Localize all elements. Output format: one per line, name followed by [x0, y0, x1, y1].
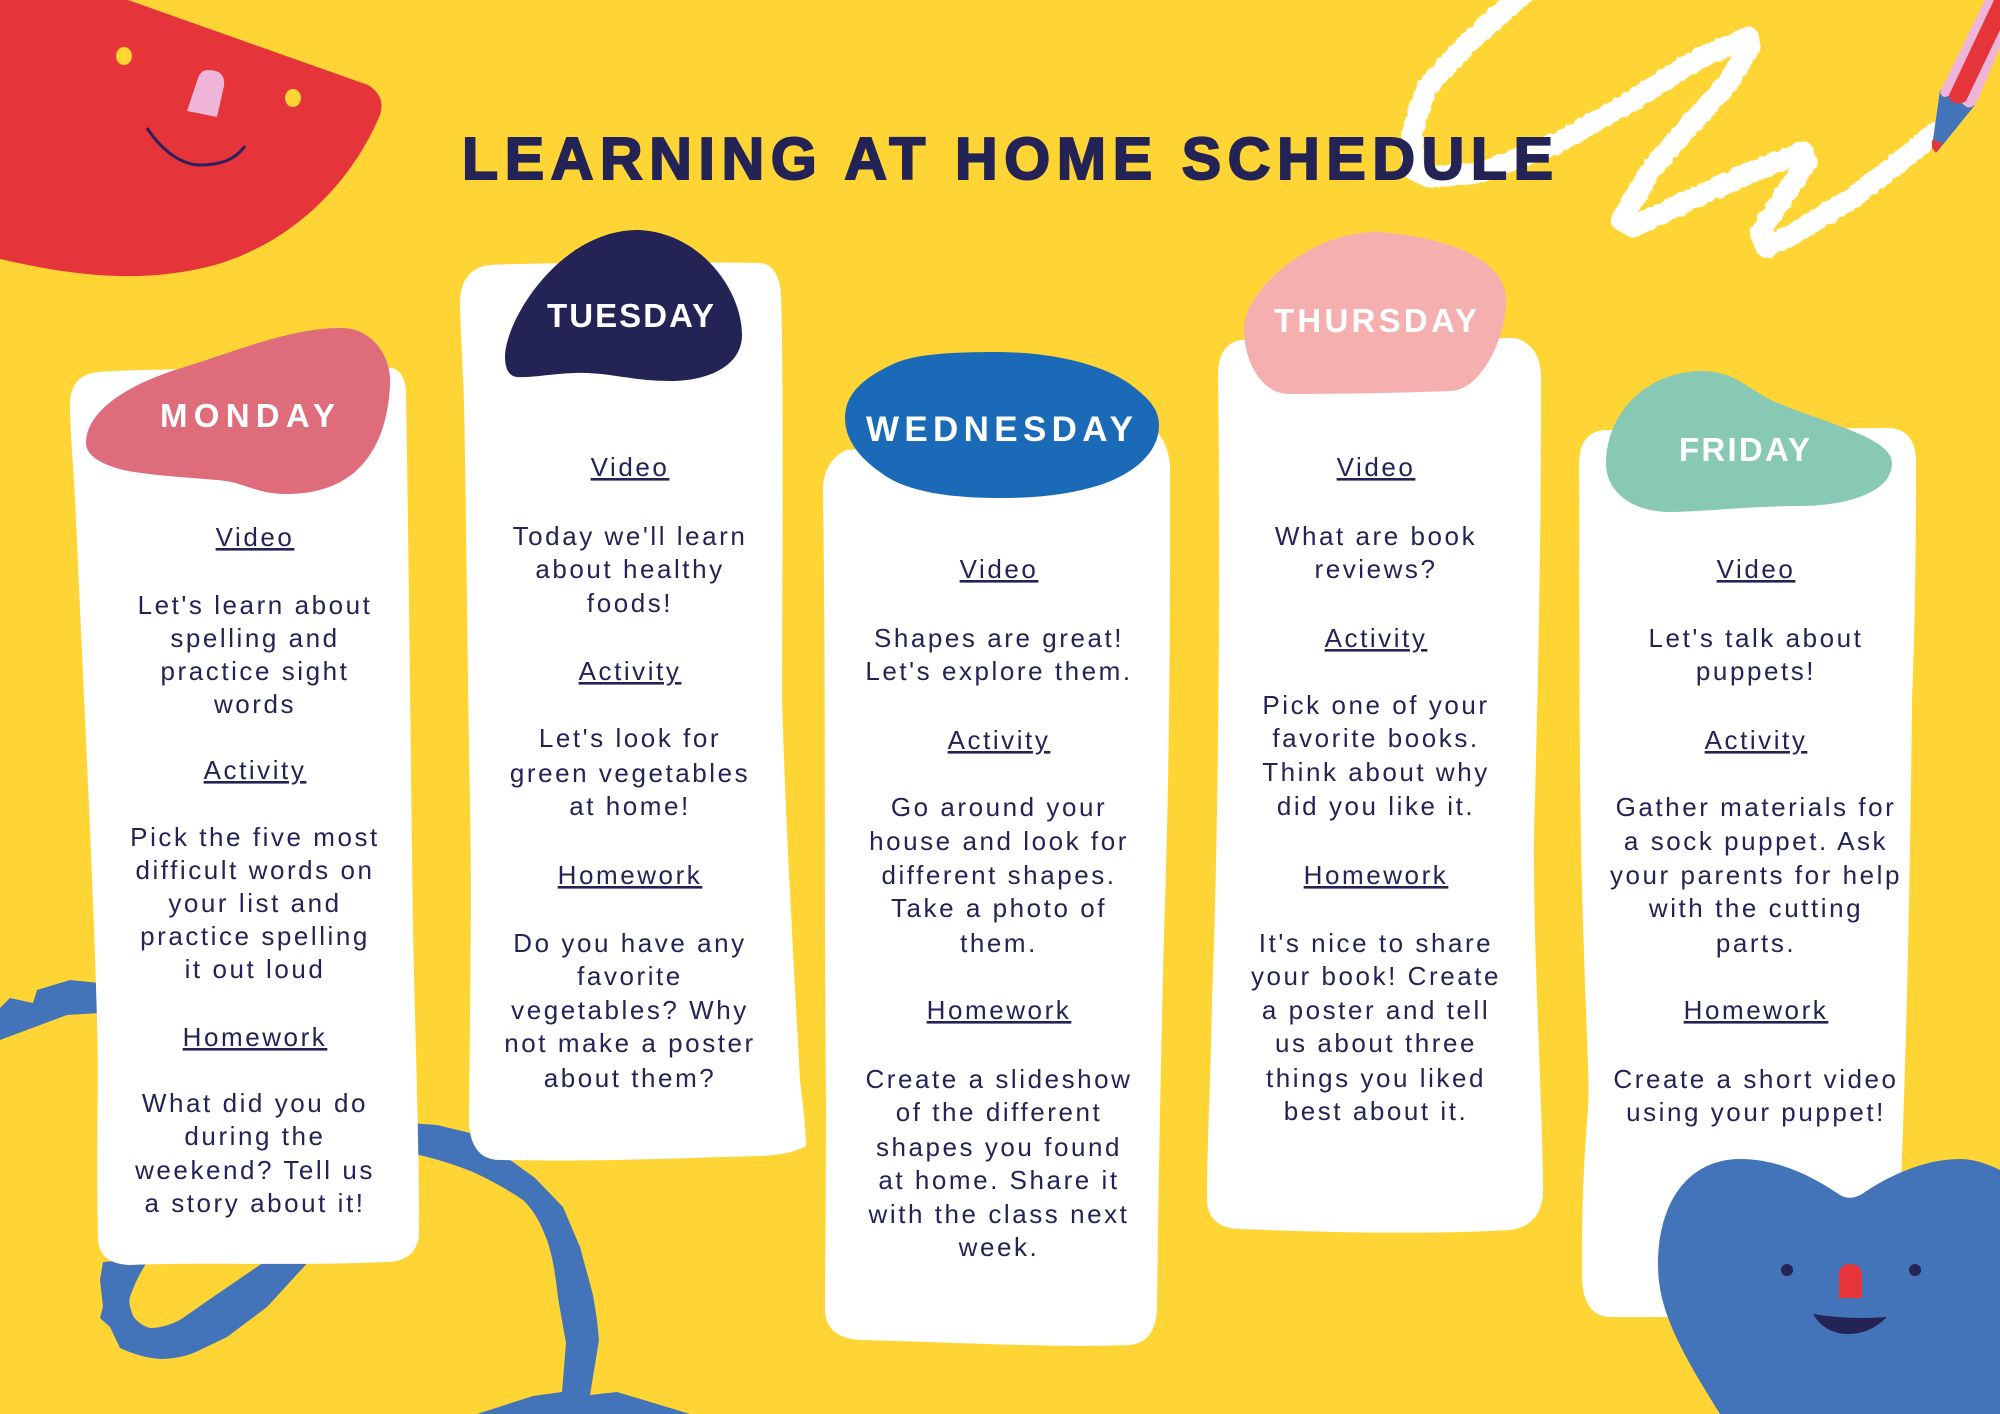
- tuesday text: not make a poster: [504, 1028, 756, 1058]
- tuesday text: Homework: [558, 860, 702, 890]
- thursday text: best about it.: [1284, 1096, 1468, 1126]
- wednesday text: [865, 554, 1133, 1262]
- friday text: Gather materials for: [1616, 792, 1896, 822]
- monday text: practice spelling: [140, 921, 370, 951]
- thursday text: It's nice to share: [1259, 928, 1493, 958]
- monday text: practice sight: [161, 656, 349, 686]
- monday text: difficult words on: [135, 855, 375, 885]
- wednesday text: shapes you found: [876, 1132, 1122, 1162]
- tuesday text: favorite: [577, 961, 683, 991]
- tuesday text: about them?: [544, 1063, 716, 1093]
- wednesday text: house and look for: [869, 826, 1129, 856]
- monday text: What did you do: [142, 1088, 368, 1118]
- friday heading: FRIDAY: [1679, 431, 1810, 468]
- monday text: Homework: [183, 1022, 327, 1052]
- friday text: parts.: [1716, 928, 1796, 958]
- monday text: weekend? Tell us: [134, 1155, 375, 1185]
- tuesday text: Let's look for: [539, 723, 721, 753]
- monday text: Let's learn about: [138, 590, 372, 620]
- tuesday text: Do you have any: [513, 928, 747, 958]
- blue squiggle background: [0, 980, 690, 1414]
- tuesday text: about healthy: [535, 554, 725, 584]
- thursday text: Homework: [1304, 860, 1448, 890]
- thursday text: What are book: [1275, 521, 1477, 551]
- monday text: Pick the five most: [130, 822, 380, 852]
- monday text: [130, 522, 380, 1218]
- wednesday text: Let's explore them.: [865, 656, 1133, 686]
- friday text: using your puppet!: [1626, 1097, 1886, 1127]
- tuesday text: foods!: [587, 588, 673, 618]
- wednesday text: at home. Share it: [878, 1165, 1120, 1195]
- tuesday text: Today we'll learn: [513, 521, 747, 551]
- wednesday text: Go around your: [891, 792, 1107, 822]
- tuesday text: vegetables? Why: [511, 995, 749, 1025]
- panel: tuesday: [460, 230, 806, 1161]
- tuesday heading: TUESDAY: [547, 297, 714, 334]
- wednesday text: week.: [958, 1232, 1039, 1262]
- thursday heading: THURSDAY: [1274, 302, 1477, 339]
- friday text: puppets!: [1696, 656, 1816, 686]
- tuesday text: Video: [591, 452, 669, 482]
- monday text: words: [213, 689, 296, 719]
- wednesday text: different shapes.: [881, 860, 1117, 890]
- title: LEARNING AT HOME SCHEDULE: [462, 126, 1553, 192]
- tuesday text: [504, 452, 756, 1093]
- friday text: Homework: [1684, 995, 1828, 1025]
- thursday heading: [1244, 232, 1506, 394]
- wednesday text: Video: [960, 554, 1038, 584]
- friday text: your parents for help: [1610, 860, 1902, 890]
- wednesday text: them.: [960, 928, 1038, 958]
- wednesday text: with the class next: [868, 1199, 1129, 1229]
- thursday text: Think about why: [1262, 757, 1490, 787]
- thursday text: did you like it.: [1277, 791, 1475, 821]
- monday heading: MONDAY: [160, 397, 335, 434]
- thursday text: Video: [1337, 452, 1415, 482]
- red smiling blob: [0, 0, 382, 276]
- panel: monday: [70, 328, 419, 1265]
- panel: friday: [1579, 371, 1916, 1317]
- panel: thursday: [1207, 232, 1543, 1233]
- friday text: Video: [1717, 554, 1795, 584]
- monday text: a story about it!: [144, 1188, 366, 1218]
- monday text: Video: [216, 522, 294, 552]
- thursday text: your book! Create: [1251, 961, 1501, 991]
- wednesday heading: [845, 352, 1159, 498]
- friday text: Let's talk about: [1649, 623, 1863, 653]
- monday heading: [86, 328, 390, 494]
- friday heading: [1606, 371, 1892, 512]
- friday text: Activity: [1705, 725, 1807, 755]
- friday text: Create a short video: [1613, 1064, 1899, 1094]
- wednesday text: Shapes are great!: [874, 623, 1124, 653]
- friday text: with the cutting: [1648, 893, 1863, 923]
- white scribble line: [1412, 0, 1934, 247]
- friday text: [1610, 554, 1902, 1127]
- thursday text: Activity: [1325, 623, 1427, 653]
- thursday text: Pick one of your: [1262, 690, 1490, 720]
- monday text: spelling and: [170, 623, 340, 653]
- thursday text: favorite books.: [1272, 723, 1480, 753]
- thursday text: reviews?: [1314, 554, 1438, 584]
- thursday text: us about three: [1275, 1028, 1477, 1058]
- thursday text: a poster and tell: [1262, 995, 1490, 1025]
- wednesday text: Create a slideshow: [865, 1064, 1133, 1094]
- wednesday heading: WEDNESDAY: [866, 410, 1133, 449]
- monday text: during the: [184, 1121, 326, 1151]
- friday text: a sock puppet. Ask: [1624, 826, 1888, 856]
- pencil: [1932, 0, 2000, 153]
- monday text: it out loud: [185, 954, 325, 984]
- tuesday heading: [505, 230, 742, 381]
- monday text: your list and: [168, 888, 342, 918]
- wednesday text: Homework: [927, 995, 1071, 1025]
- monday text: Activity: [204, 755, 306, 785]
- thursday text: things you liked: [1266, 1063, 1486, 1093]
- blue heart character: [1658, 1159, 2000, 1414]
- tuesday text: at home!: [569, 791, 691, 821]
- thursday text: [1251, 452, 1501, 1126]
- panel: wednesday: [823, 352, 1170, 1346]
- wednesday text: Activity: [948, 725, 1050, 755]
- wednesday text: of the different: [896, 1097, 1102, 1127]
- tuesday text: Activity: [579, 656, 681, 686]
- tuesday text: green vegetables: [510, 758, 750, 788]
- wednesday text: Take a photo of: [891, 893, 1107, 923]
